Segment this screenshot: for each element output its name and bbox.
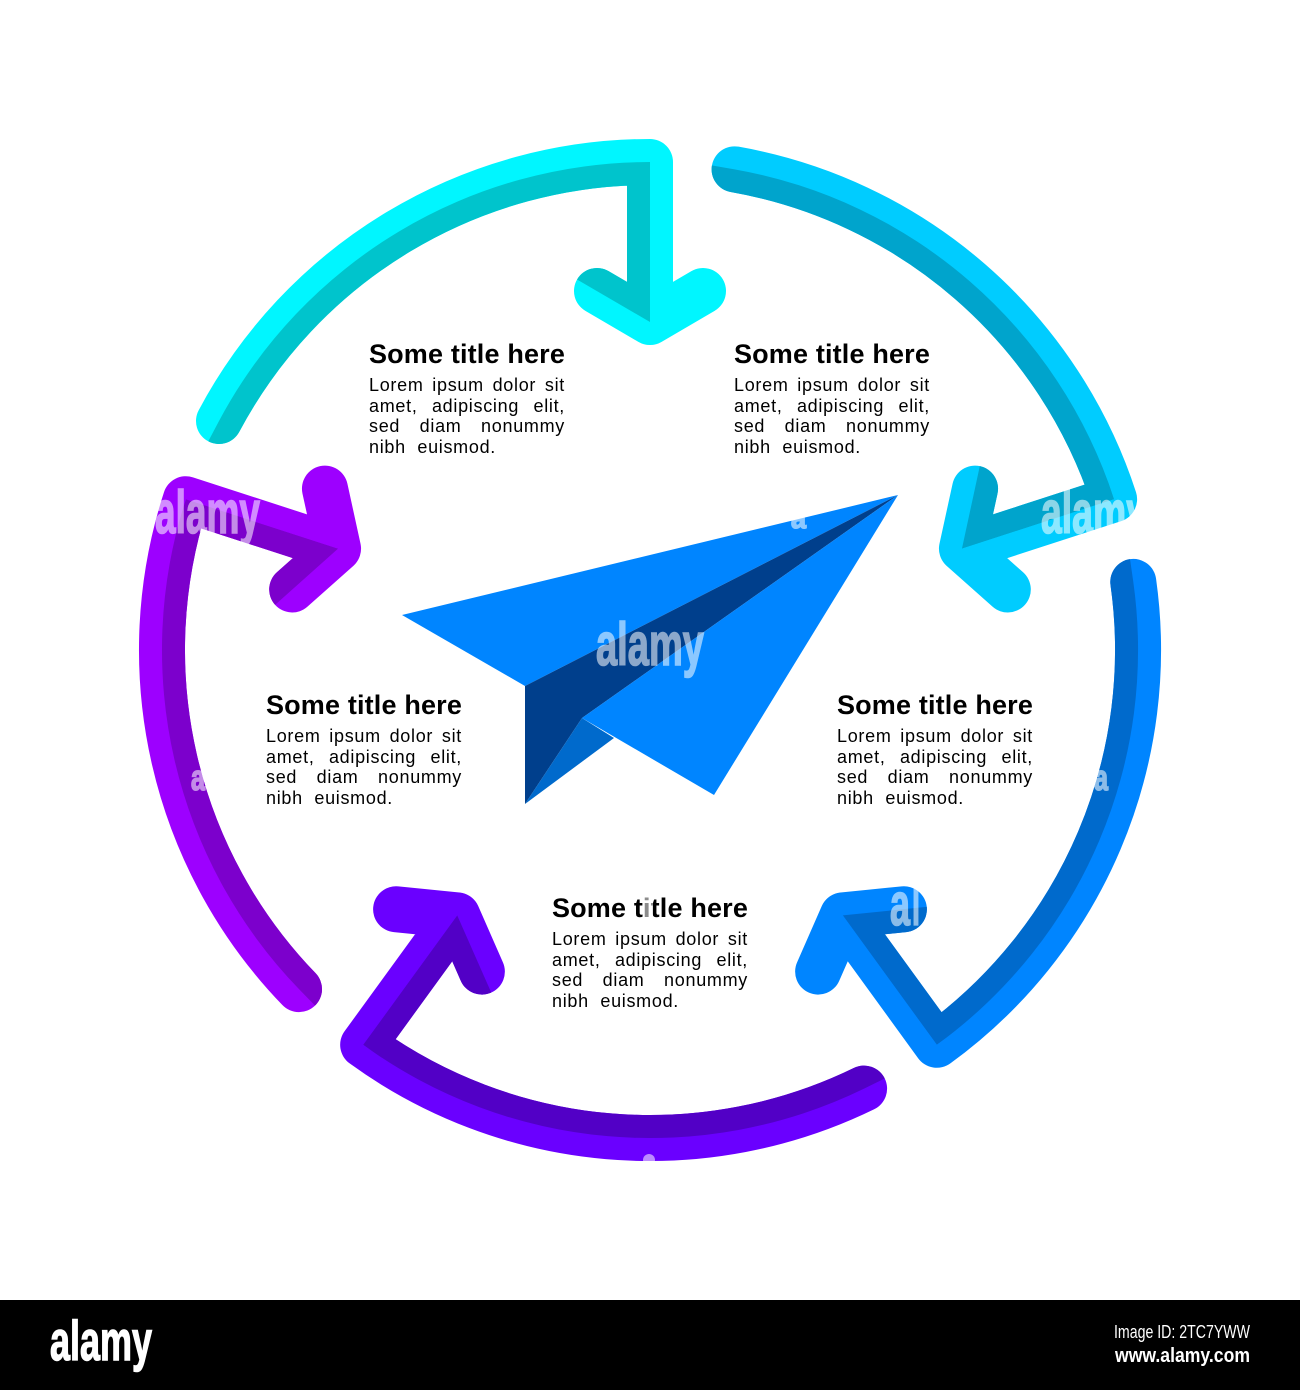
text block: top left: amet, adipiscing elit, (369, 396, 565, 416)
text block: middle left: nibh euismod. (266, 788, 393, 808)
arrow 1: cyan (219, 162, 703, 421)
footer logo: www.alamy.com (1114, 1345, 1250, 1367)
text block: top right: amet, adipiscing elit, (734, 396, 930, 416)
text block: top left: Lorem ipsum dolor sit (369, 375, 565, 395)
footer logo (50, 1309, 1250, 1372)
text block: top left (369, 339, 565, 457)
text block: top left: sed diam nonummy (369, 416, 565, 436)
footer logo: Image ID: 2TC7YWW (1114, 1322, 1250, 1342)
arrow 4: indigo (340, 886, 888, 1161)
watermarks: alamy (1041, 479, 1147, 546)
cycle diagram with five arrows and paper plane (138, 139, 1162, 1161)
text block: top left: nibh euismod. (369, 437, 496, 457)
text block: top right: nibh euismod. (734, 437, 861, 457)
text block: middle right: sed diam nonummy (837, 767, 1033, 787)
text block: top right: sed diam nonummy (734, 416, 930, 436)
icon: paper plane (402, 495, 898, 804)
text block: top left: Some title here (369, 339, 565, 369)
text block: middle right: Some title here (837, 690, 1033, 720)
arrow 2: sky blue (735, 89, 1130, 630)
text block: middle left: sed diam nonummy (266, 767, 462, 787)
text block: top right: Lorem ipsum dolor sit (734, 375, 930, 395)
text block: bottom center: Lorem ipsum dolor sit (552, 929, 748, 949)
text block: bottom center: nibh euismod. (552, 991, 679, 1011)
text block: middle left: Some title here (266, 690, 462, 720)
text block: bottom center: amet, adipiscing elit, (552, 950, 748, 970)
watermarks: a (890, 871, 910, 938)
text block: middle right: amet, adipiscing elit, (837, 747, 1033, 767)
watermarks: a (1094, 757, 1109, 798)
footer logo: alamy (50, 1309, 152, 1372)
text block: bottom center: Some title here (552, 893, 748, 923)
text block: middle right (837, 690, 1033, 808)
text block: middle left: amet, adipiscing elit, (266, 747, 462, 767)
watermarks: a (791, 502, 806, 535)
watermarks: alamy (596, 611, 704, 678)
watermarks: l (912, 880, 920, 936)
arrow 5: purple (138, 466, 362, 1012)
text block: middle left (266, 690, 462, 808)
text block: bottom center: sed diam nonummy (552, 970, 748, 990)
footer bar (0, 1300, 1300, 1390)
watermarks: alamy (155, 479, 260, 546)
arrow 3: blue (795, 558, 1162, 1068)
text block: top right (734, 339, 930, 457)
text block: middle left: Lorem ipsum dolor sit (266, 726, 462, 746)
text block: middle right: nibh euismod. (837, 788, 964, 808)
text block: bottom center (552, 893, 748, 1011)
text block: top right: Some title here (734, 339, 930, 369)
text block: middle right: Lorem ipsum dolor sit (837, 726, 1033, 746)
watermarks: a (191, 757, 206, 798)
